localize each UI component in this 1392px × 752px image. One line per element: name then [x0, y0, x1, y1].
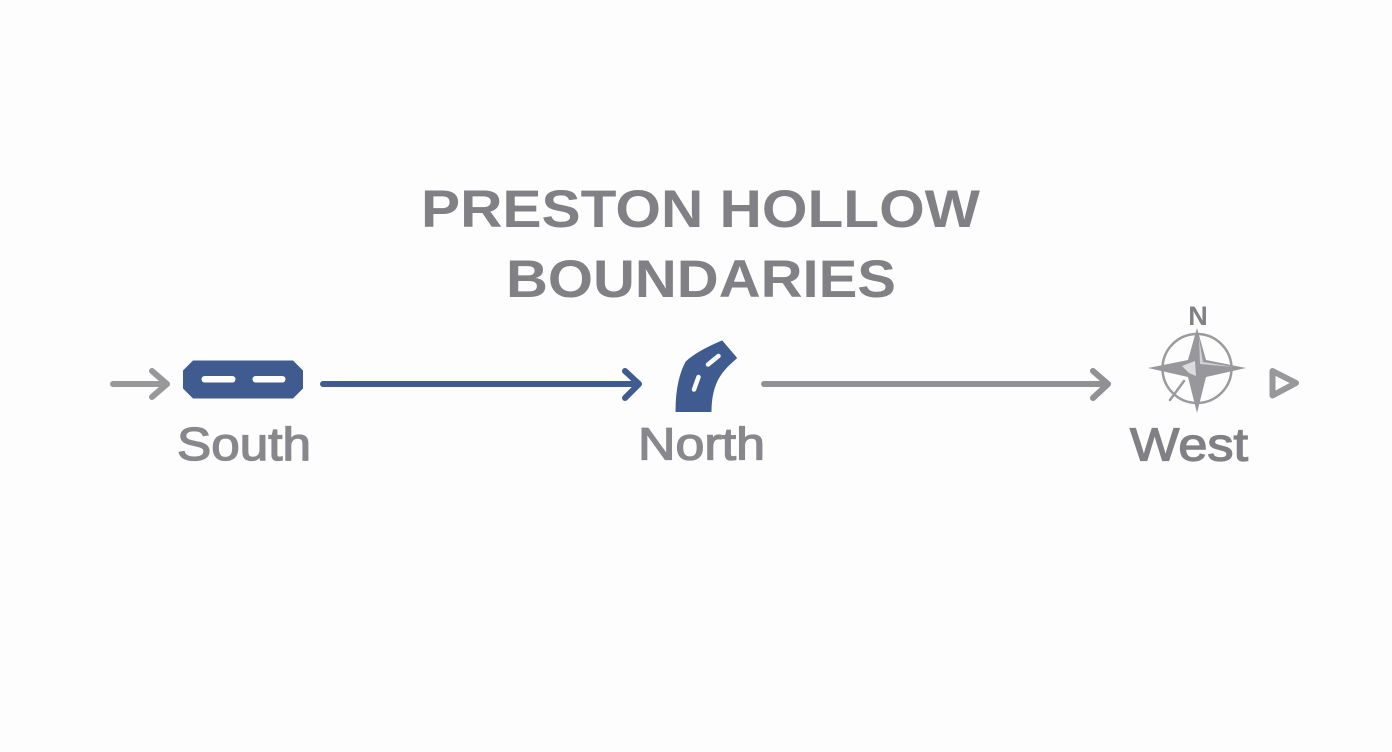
icon: straight road: [183, 360, 303, 398]
icon: curved road: [676, 341, 736, 412]
icon: compass: N: [1188, 301, 1208, 331]
label: South: South: [177, 418, 311, 470]
title: PRESTON HOLLOW: [421, 180, 980, 239]
arrow: North to West: [764, 371, 1108, 398]
arrow: entry: [113, 371, 167, 397]
icon: play triangle: [1272, 371, 1296, 396]
icon: compass: [1148, 301, 1246, 413]
label: West: West: [1130, 418, 1248, 470]
title: [421, 180, 980, 309]
label: North: North: [638, 418, 765, 470]
title: BOUNDARIES: [506, 250, 896, 309]
arrow: South to North: [323, 371, 639, 398]
